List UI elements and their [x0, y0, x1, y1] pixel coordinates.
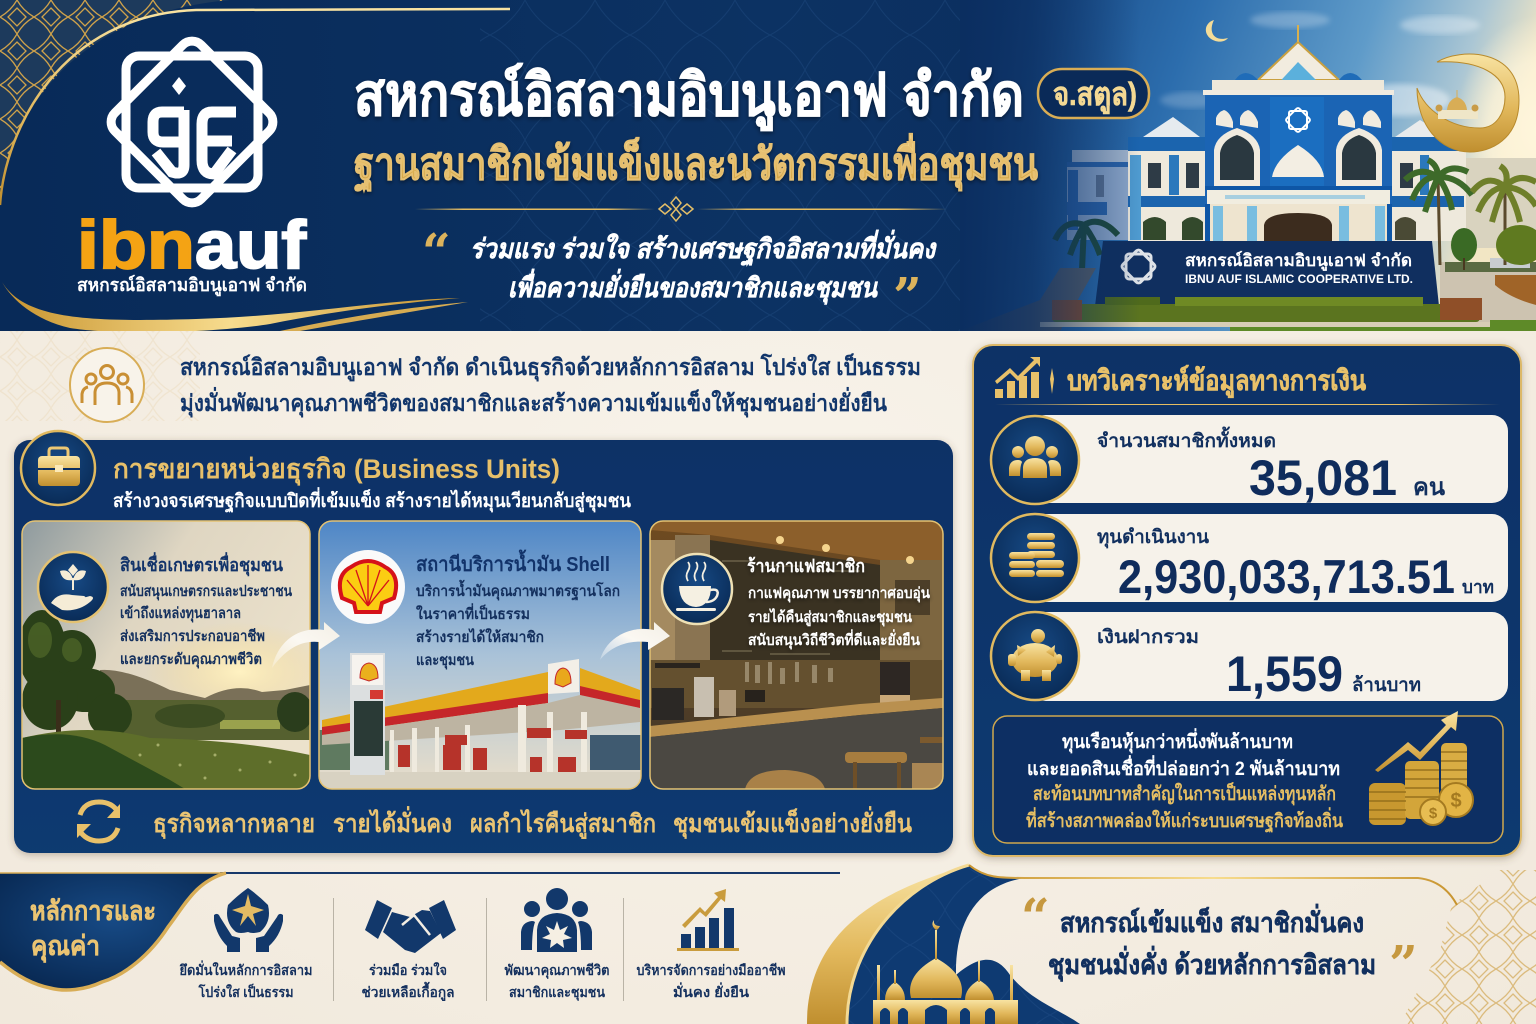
icon: community	[521, 888, 592, 952]
gold swoosh	[2, 282, 468, 332]
right far wing	[1450, 158, 1536, 248]
card text: และชุมชน	[416, 652, 475, 670]
business slogans	[153, 806, 912, 840]
principle text: พัฒนาคุณภาพชีวิต	[504, 962, 610, 979]
card text: บริการน้ำมันคุณภาพมาตรฐานโลก	[416, 579, 620, 601]
central block	[1203, 25, 1394, 241]
business subheading: สร้างวงจรเศรษฐกิจแบบปิดที่เข้มแข็ง สร้างรายได้หมุนเวียนกลับสู่ชุมชน	[113, 487, 631, 514]
card title: ร้านกาแฟสมาชิก	[747, 556, 865, 576]
icon: cycle arrows	[77, 802, 120, 841]
stat unit: คน	[1413, 474, 1446, 501]
principle text	[179, 960, 312, 1000]
business heading: การขยายหน่วยธุรกิจ (Business Units)	[113, 454, 560, 486]
ornament divider	[415, 197, 947, 221]
coffee machines	[652, 662, 910, 720]
quote: mission: ร่วมแรง ร่วมใจ สร้างเศรษฐกิจอิสลามที่มั่นคง	[470, 229, 938, 267]
icon: plant in hand	[38, 552, 108, 622]
chalkboard	[710, 540, 880, 665]
business slogans: ผลกำไรคืนสู่สมาชิก	[470, 808, 656, 840]
card text	[748, 585, 931, 650]
card text: ในราคาที่เป็นธรรม	[416, 603, 530, 623]
monument sign: IBNU AUF ISLAMIC COOPERATIVE LTD.	[1185, 272, 1413, 286]
small trees	[1451, 225, 1536, 270]
intro icon	[70, 348, 144, 422]
stat value: 1,559	[1226, 646, 1343, 702]
icon: coin stacks and arrow: $	[1450, 790, 1462, 812]
quote: mission: “	[422, 222, 451, 281]
stat value: 2,930,033,713.51	[1118, 550, 1455, 603]
hedge	[1052, 297, 1482, 322]
business slogans: ธุรกิจหลากหลาย	[153, 810, 315, 840]
stat value: 35,081	[1249, 450, 1397, 506]
quote: mission: ”	[893, 266, 922, 325]
left wing	[1128, 117, 1206, 241]
tab heading: หลักการและ	[30, 896, 156, 926]
logo wordmark: auf	[195, 207, 306, 283]
icon: piggy bank	[991, 612, 1079, 700]
canopy left and right	[322, 672, 548, 735]
icon: handshake	[365, 900, 456, 953]
closing quote: ชุมชนมั่งคั่ง ด้วยหลักการอิสลาม	[1048, 945, 1376, 982]
principle text: ร่วมมือ ร่วมใจ	[369, 961, 447, 978]
icon: rising chart	[677, 889, 739, 951]
closing quote: สหกรณ์เข้มแข็ง สมาชิกมั่นคง	[1060, 903, 1364, 938]
icon: coffee cup	[662, 554, 732, 624]
panel: business units	[14, 431, 953, 853]
shelves with bottles	[650, 660, 943, 708]
principle 1	[179, 888, 312, 1000]
arched windows	[1214, 110, 1382, 187]
card text: และยกระดับคุณภาพชีวิต	[120, 650, 262, 669]
card text: สนับสนุนวิถีชีวิตที่ดีและยั่งยืน	[748, 629, 921, 650]
stat: members	[991, 415, 1508, 506]
closing quote: ”	[1389, 934, 1418, 993]
callout text: และยอดสินเชื่อที่ปล่อยกว่า 2 พันล้านบาท	[1027, 755, 1340, 780]
corner lattice: top left	[0, 0, 230, 205]
stat unit: ล้านบาท	[1352, 674, 1421, 696]
principle text	[362, 961, 454, 1001]
driveway	[1002, 268, 1096, 331]
icon: coin stacks and arrow	[1369, 711, 1473, 825]
stat unit: บาท	[1462, 577, 1494, 597]
intro text: สหกรณ์อิสลามอิบนูเอาฟ จำกัด ดำเนินธุรกิจด้วยหลักการอิสลาม โปร่งใส เป็นธรรม	[180, 352, 921, 382]
quote: mission	[425, 230, 937, 305]
corner lattice: bottom right	[1400, 870, 1536, 1024]
card: agricultural credit	[18, 521, 335, 789]
stat: deposits	[991, 612, 1508, 702]
emblem on building	[1285, 107, 1311, 133]
card: shell station	[319, 521, 641, 789]
card: member cafe	[650, 521, 943, 789]
card title: สินเชื่อเกษตรเพื่อชุมชน	[120, 552, 284, 577]
logo emblem	[106, 36, 278, 208]
intro text	[180, 352, 921, 418]
ceiling	[652, 522, 942, 560]
card text: รายได้คืนสู่สมาชิกและชุมชน	[748, 607, 913, 627]
icon: shell	[331, 550, 405, 624]
left fade to navy	[960, 0, 1140, 331]
callout text: ทุนเรือนหุ้นกว่าหนึ่งพันล้านบาท	[1062, 728, 1293, 754]
crescent mosque emblem	[807, 865, 1080, 1024]
principle text	[504, 962, 610, 1001]
moon	[1206, 20, 1228, 42]
card text: สนับสนุนเกษตรกรและประชาชน	[120, 583, 293, 601]
province badge: จ.สตูล)	[1053, 76, 1137, 115]
principle text: บริหารจัดการอย่างมืออาชีพ	[636, 962, 786, 978]
tab heading	[30, 896, 156, 963]
logo wordmark: ibn	[77, 207, 195, 283]
title: สหกรณ์อิสลามอิบนูเอาฟ จำกัด	[354, 62, 1024, 131]
logo caption: สหกรณ์อิสลามอิบนูเอาฟ จำกัด	[77, 274, 307, 297]
pendant lights	[776, 536, 914, 564]
mosque	[873, 920, 1018, 1024]
card text	[416, 579, 620, 670]
panel: financial analysis	[0, 345, 1536, 1024]
faint top corner lattice	[0, 331, 200, 421]
card text: กาแฟคุณภาพ บรรยากาศอบอุ่น	[748, 585, 931, 603]
logo wordmark	[81, 218, 308, 270]
principle text: สมาชิกและชุมชน	[509, 984, 605, 1001]
principle text: โปร่งใส เป็นธรรม	[198, 983, 294, 1000]
gold crescent with mosque	[1417, 54, 1519, 152]
palm trees	[1055, 160, 1536, 270]
counter	[650, 698, 943, 737]
far left wing	[1067, 150, 1128, 240]
principle text	[636, 962, 786, 1000]
monument sign	[1095, 241, 1439, 306]
arrow: card 2 to card 3	[600, 622, 670, 660]
closing quote: “	[1021, 887, 1050, 946]
icon: coin stacks and arrow: $	[1429, 805, 1438, 822]
stat label: ทุนดำเนินงาน	[1097, 527, 1209, 549]
quote: mission: เพื่อความยั่งยืนของสมาชิกและชุมชน	[508, 268, 878, 305]
closing quote	[1021, 887, 1418, 993]
card text: สร้างรายได้ให้สมาชิก	[416, 627, 544, 646]
callout text	[1026, 728, 1343, 834]
card text: ส่งเสริมการประกอบอาชีพ	[120, 627, 265, 645]
price pylon	[350, 653, 385, 775]
principle text: ช่วยเหลือเกื้อกูล	[362, 981, 454, 1001]
stat label: จำนวนสมาชิกทั้งหมด	[1097, 426, 1276, 452]
card text: เข้าถึงแหล่งทุนฮาลาล	[120, 604, 241, 623]
principle text: ยึดมั่นในหลักการอิสลาม	[179, 960, 312, 978]
icon: hands and star	[214, 888, 283, 952]
stat: working capital	[991, 514, 1508, 603]
tree	[22, 610, 132, 732]
card title: สถานีบริการน้ำมัน Shell	[416, 549, 610, 576]
background trees and ground	[319, 730, 389, 770]
icon: coins	[991, 514, 1079, 602]
canopy sign	[548, 659, 579, 694]
principle 4	[636, 889, 786, 1000]
quote box frame	[969, 865, 1457, 905]
right wing	[1392, 120, 1466, 241]
principle text: มั่นคง ยั่งยืน	[673, 982, 749, 1000]
header rule	[995, 404, 1500, 405]
card text	[120, 583, 293, 669]
icon: growth chart	[995, 357, 1040, 398]
column dividers	[333, 898, 624, 1001]
tab heading: คุณค่า	[31, 931, 100, 963]
icon: members	[991, 416, 1079, 504]
province badge	[1038, 69, 1149, 118]
principle 3	[504, 888, 610, 1001]
kerb and lawn	[1040, 320, 1536, 331]
callout: capital summary	[993, 711, 1503, 843]
bottom rule	[220, 872, 840, 874]
gold arc frame	[0, 9, 510, 205]
financial heading: บทวิเคราะห์ข้อมูลทางการเงิน	[1067, 365, 1366, 398]
icon: briefcase	[21, 431, 95, 505]
business slogans: รายได้มั่นคง	[333, 806, 452, 838]
callout text: สะท้อนบทบาทสำคัญในการเป็นแหล่งทุนหลัก	[1033, 781, 1336, 806]
arrow: card 1 to card 2	[272, 622, 340, 668]
intro text: มุ่งมั่นพัฒนาคุณภาพชีวิตของสมาชิกและสร้างความเข้มแข็งให้ชุมชนอย่างยั่งยืน	[180, 386, 887, 418]
tab: principles	[0, 873, 226, 990]
business slogans: ชุมชนเข้มแข็งอย่างยั่งยืน	[673, 806, 912, 840]
stat label: เงินฝากรวม	[1097, 627, 1199, 648]
sparkle	[1050, 368, 1054, 394]
callout text: ที่สร้างสภาพคล่องให้แก่ระบบเศรษฐกิจท้องถิ่น	[1026, 807, 1343, 834]
monument sign: สหกรณ์อิสลามอิบนูเอาฟ จำกัด	[1185, 250, 1412, 272]
ground right	[1440, 258, 1536, 322]
building photo	[960, 0, 1536, 331]
principle 2	[362, 900, 456, 1001]
header banner	[0, 0, 1536, 332]
subtitle: ฐานสมาชิกเข้มแข็งและนวัตกรรมเพื่อชุมชน	[354, 133, 1038, 192]
wall	[650, 540, 675, 660]
